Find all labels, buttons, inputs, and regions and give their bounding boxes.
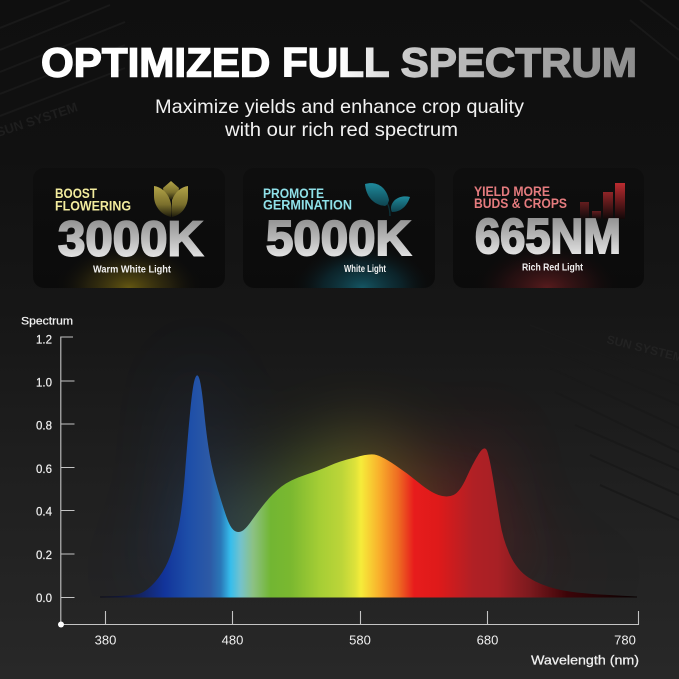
heading: promote germination: PROMOTE <box>263 186 324 201</box>
subtitle <box>155 96 524 141</box>
subtitle: with our rich red spectrum <box>224 119 458 141</box>
y axis labels: 0.2 <box>36 550 52 562</box>
heading: yield more buds and crops <box>474 184 567 211</box>
value: 665NM: 665NM <box>475 210 621 264</box>
panel: 665NM rich red light <box>453 168 644 288</box>
x axis labels <box>95 632 636 648</box>
label: rich red light: Rich Red Light <box>522 262 584 274</box>
label: white light: White Light <box>344 264 387 275</box>
heading: promote germination <box>263 186 352 212</box>
heading: boost flowering: FLOWERING <box>55 198 131 214</box>
axis origin dot <box>58 622 64 628</box>
panel: 3000K warm white light <box>33 168 225 288</box>
heading: boost flowering: BOOST <box>55 186 98 201</box>
title: OPTIMIZED FULL SPECTRUM <box>41 40 637 86</box>
x axis title: Wavelength (nm) <box>531 652 639 668</box>
value: 3000K: 3000K <box>58 212 203 266</box>
panel: 5000K white light <box>243 168 435 288</box>
subtitle: Maximize yields and enhance crop quality <box>155 96 524 118</box>
icon: tulip <box>154 181 188 217</box>
y axis <box>61 337 74 624</box>
y axis labels: 0.0 <box>36 593 52 605</box>
x axis <box>61 611 638 624</box>
spectrum curve <box>100 375 637 598</box>
x axis labels: 680 <box>477 632 498 648</box>
chart glow <box>145 406 539 578</box>
x axis labels: 580 <box>349 632 371 648</box>
y axis labels <box>36 334 53 605</box>
x axis labels: 780 <box>614 632 636 648</box>
icon: sprout leaves <box>365 183 410 216</box>
value: 5000K: 5000K <box>266 212 411 266</box>
y axis labels: 1.0 <box>36 378 52 390</box>
icon: rising bars <box>580 183 625 219</box>
y axis labels: 0.4 <box>36 506 53 518</box>
x axis labels: 480 <box>222 632 243 648</box>
y axis labels: 0.8 <box>36 420 52 432</box>
spectrum chart <box>21 316 639 668</box>
heading: yield more buds and crops: YIELD MORE <box>474 184 550 199</box>
y axis labels: 0.6 <box>36 464 52 476</box>
heading: promote germination: GERMINATION <box>263 198 352 212</box>
x axis labels: 380 <box>95 632 116 648</box>
y axis labels: 1.2 <box>36 334 52 346</box>
y axis title: Spectrum <box>21 316 73 328</box>
heading: boost flowering <box>55 186 131 214</box>
label: warm white light: Warm White Light <box>93 264 172 276</box>
heading: yield more buds and crops: BUDS & CROPS <box>474 196 567 211</box>
